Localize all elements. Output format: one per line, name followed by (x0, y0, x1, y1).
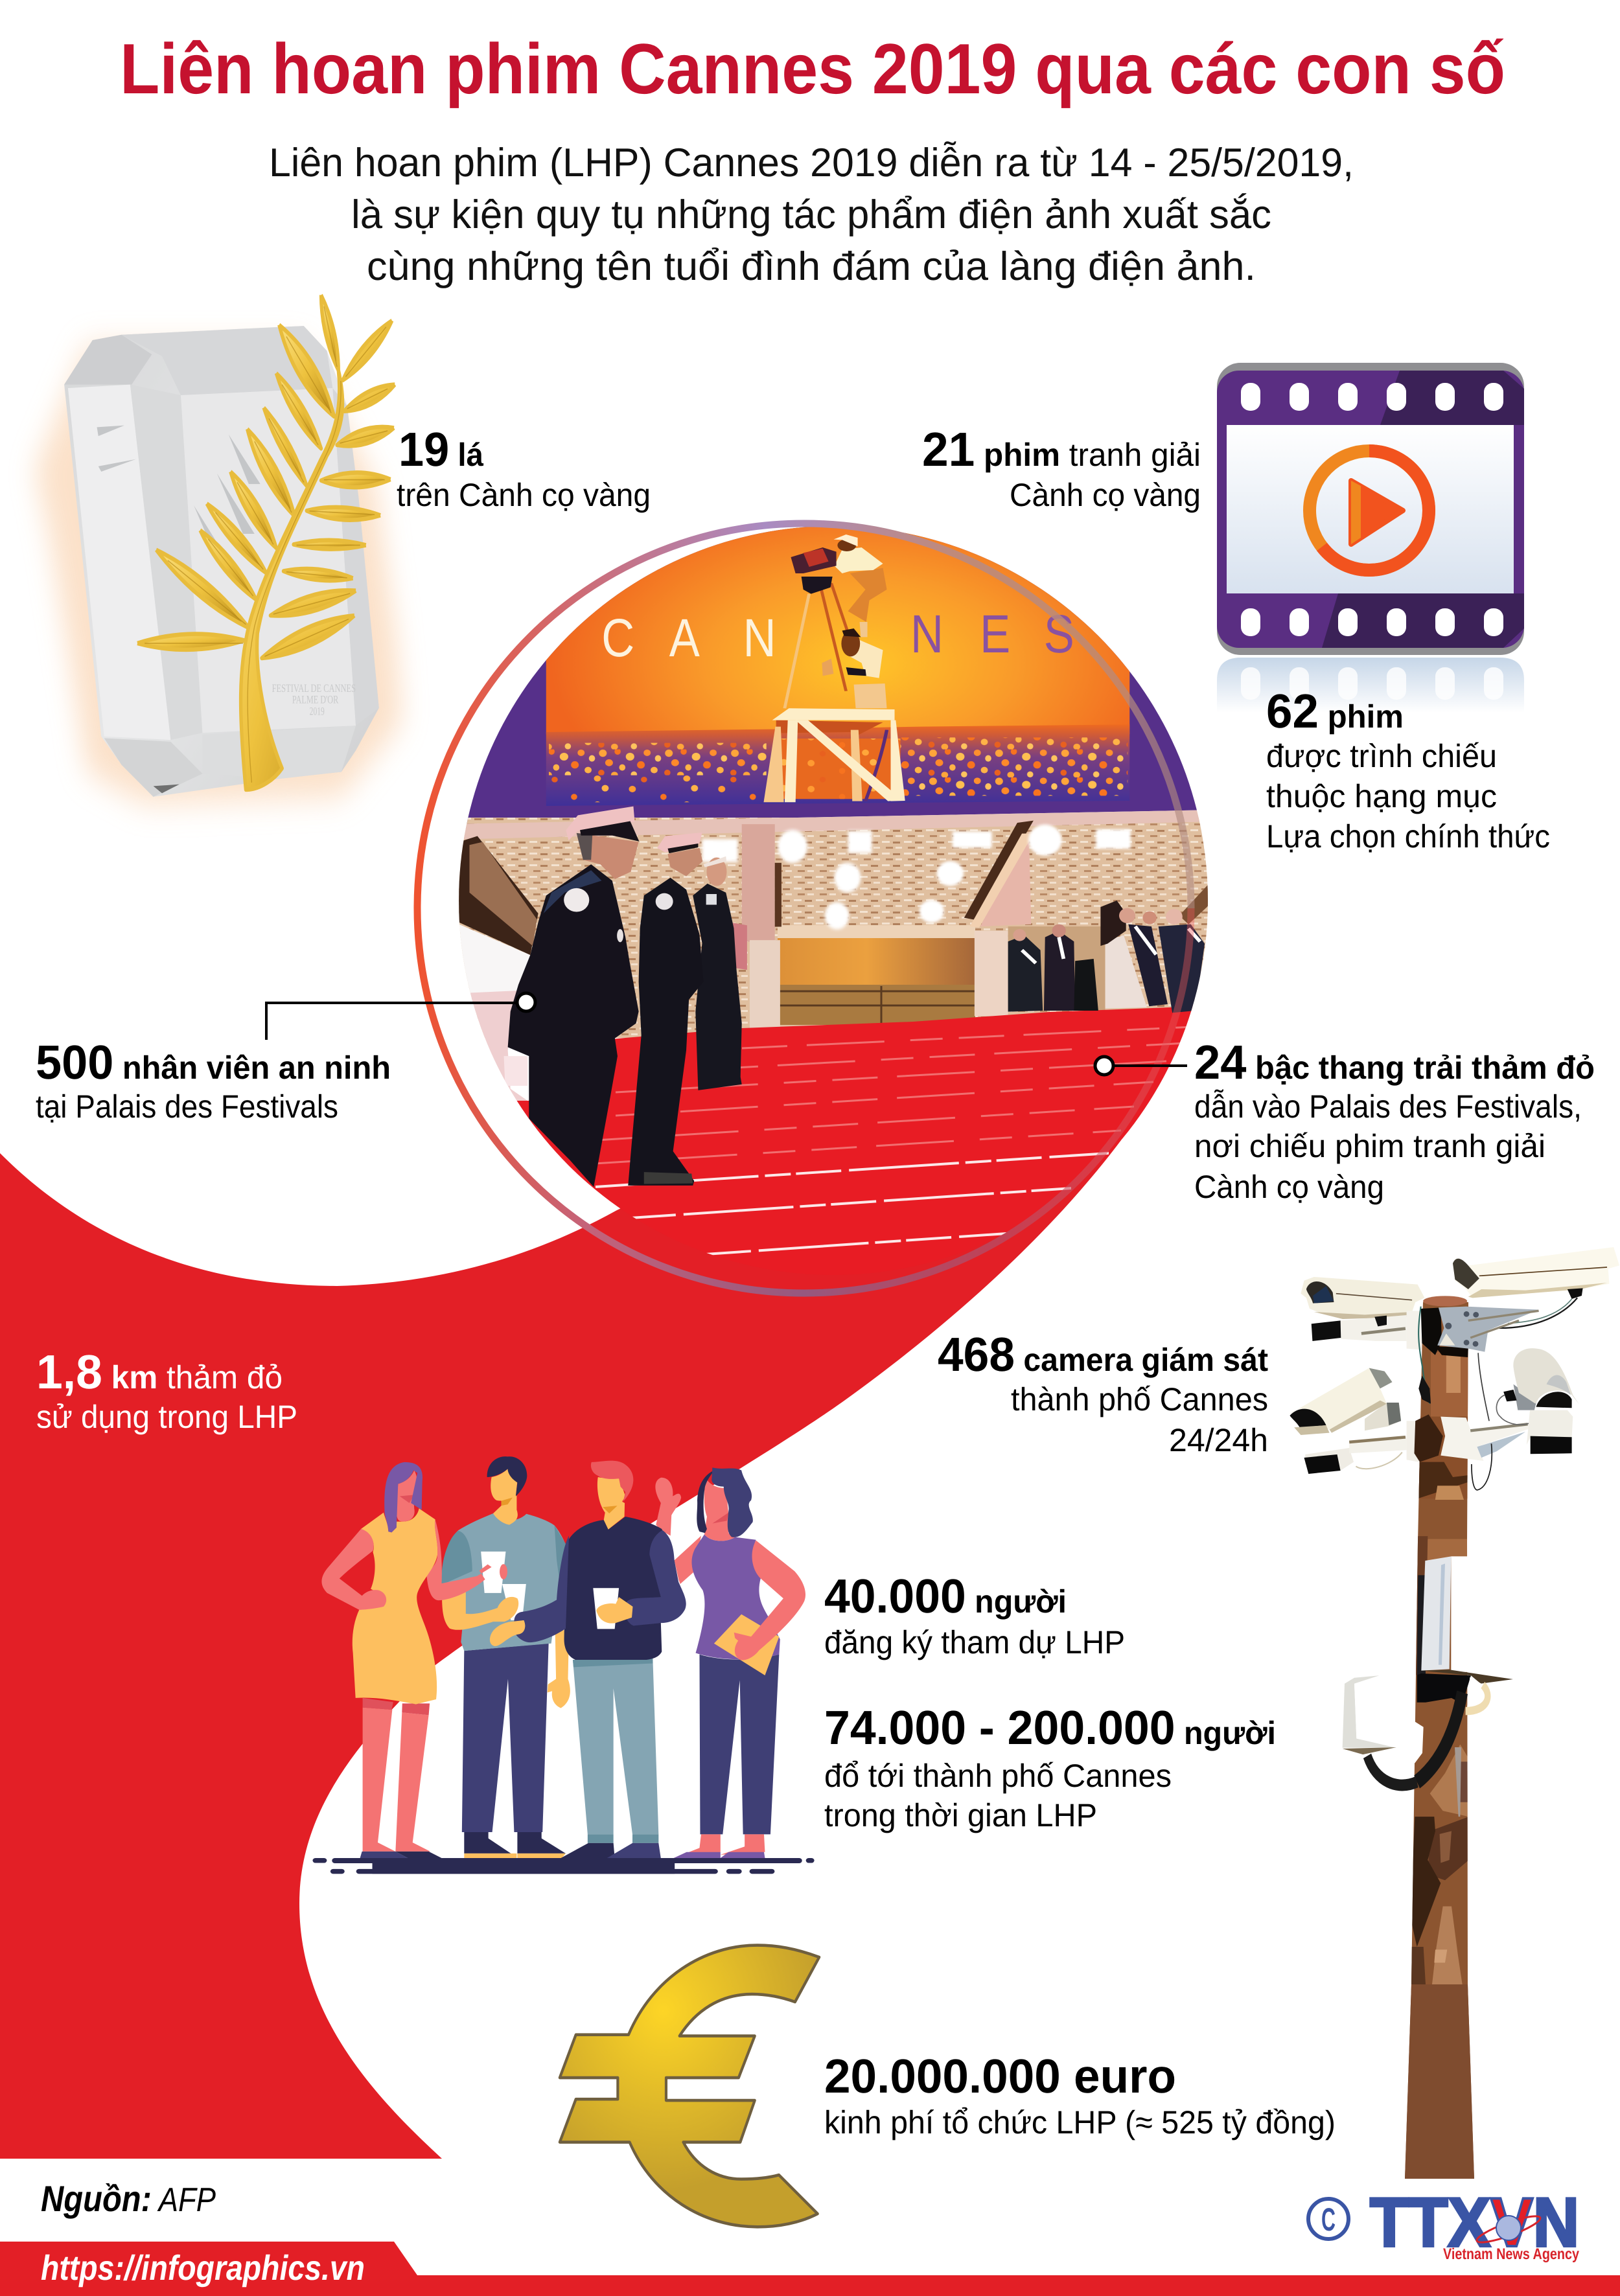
guard 1 (508, 807, 639, 1187)
palm leaves (137, 295, 395, 790)
crystal block (64, 326, 379, 797)
engraved trophy text: PALME D'OR (292, 693, 339, 706)
left drape and flowers (451, 921, 747, 1101)
stat: 21 films in competition: 21 phim tranh giải (922, 422, 1201, 476)
woman in purple top (655, 1467, 805, 1858)
intro text: là sự kiện quy tụ những tác phẩm điện ảnh xuất sắc (351, 192, 1271, 237)
illustration: security camera pole (1289, 1247, 1619, 2179)
stat: 468 cameras: thành phố Cannes (1011, 1381, 1268, 1418)
poster lettering (604, 615, 1072, 657)
stat: 500 security staff: tại Palais des Festivals (36, 1088, 338, 1125)
bright carpet stripes (596, 1153, 1109, 1254)
stat: 21 films in competition: Cành cọ vàng (1010, 477, 1201, 513)
stat: 40,000 attendees: đăng ký tham dự LHP (824, 1624, 1125, 1660)
stat: 62 films (1266, 684, 1550, 855)
poster lettering: CAN (601, 608, 776, 668)
stat: 500 security staff: 500 nhân viên an ninh (36, 1035, 391, 1089)
TTXVN wordmark: TTXVN (1370, 2183, 1579, 2261)
stat: 1.8 km red carpet: sử dụng trong LHP (36, 1399, 297, 1435)
poster sky (546, 520, 1129, 734)
top clamp (1407, 1296, 1539, 1421)
icon: gold euro sign (560, 1946, 819, 2227)
stat: 500 security staff (36, 1035, 391, 1125)
stage beam (447, 810, 1218, 840)
poster scaffold tower (764, 708, 905, 802)
stage ceiling (447, 818, 1218, 1038)
ground line (312, 1858, 815, 1874)
footer bar (0, 2242, 1620, 2296)
play button (1310, 451, 1429, 570)
red swoosh background (0, 1101, 1121, 2159)
security guards (508, 807, 742, 1187)
stat: 21 films in competition (922, 422, 1201, 513)
stat: 74,000 to 200,000 visitors: 74.000 - 200.000 người (824, 1701, 1276, 1754)
stat: 19 leaves: trên Cành cọ vàng (397, 477, 651, 513)
stat: 19 leaves (397, 422, 651, 513)
poster lettering: NES (910, 604, 1074, 664)
carpet stripes (595, 1027, 1192, 1164)
intro text: Liên hoan phim (LHP) Cannes 2019 diễn ra từ 14 - 25/5/2019, (269, 141, 1354, 185)
stat: 1.8 km red carpet: 1,8 km thảm đỏ (36, 1345, 283, 1399)
engraved trophy text (272, 682, 356, 718)
film screen (1227, 425, 1514, 593)
film reflection (1217, 658, 1524, 713)
ring around the photo (417, 523, 1191, 1293)
Cannes 2019 poster (546, 520, 1129, 806)
stat: 24 carpeted steps (1194, 1035, 1595, 1205)
stat: 62 films: 62 phim (1266, 684, 1404, 738)
stat: 24 carpeted steps: Cành cọ vàng (1194, 1169, 1384, 1205)
stat: 40,000 attendees: 40.000 người (824, 1569, 1067, 1623)
callout line: carpet steps (1095, 1057, 1187, 1075)
stat: 24 carpeted steps: dẫn vào Palais des Festivals, (1194, 1088, 1582, 1125)
illustration: group of people (312, 1456, 815, 1874)
stat: 468 cameras: 24/24h (1169, 1422, 1268, 1458)
stat: 40,000 attendees (824, 1569, 1125, 1660)
utility box and cables (1343, 1556, 1513, 1785)
film holes (1241, 383, 1503, 636)
stat: 19 leaves: 19 lá (399, 422, 483, 476)
camera 3 (1289, 1368, 1418, 1474)
icon: film strip with play button (1217, 363, 1524, 713)
callout line: security staff (266, 993, 535, 1040)
engraved trophy text: FESTIVAL DE CANNES (272, 682, 356, 695)
title: Liên hoan phim Cannes 2019 qua các con số (120, 29, 1505, 109)
guard 2 (628, 832, 704, 1186)
man in teal shirt (441, 1456, 570, 1858)
stat: 1.8 km red carpet (36, 1345, 297, 1435)
stat: 62 films: được trình chiếu (1266, 738, 1497, 774)
right-hand group of guards and guests (1008, 901, 1205, 1013)
woman in yellow dress (321, 1462, 507, 1858)
globe emblem (1475, 2212, 1542, 2247)
stat: 468 cameras (938, 1327, 1268, 1458)
intro text (269, 141, 1354, 289)
man in navy sweater (490, 1461, 686, 1858)
stat: 74,000 to 200,000 visitors: trong thời gian LHP (824, 1797, 1097, 1833)
pole trunk (1400, 1302, 1484, 2179)
logo: copyright and TTXVN (1308, 2183, 1580, 2263)
intro text: cùng những tên tuổi đình đám của làng điện ảnh. (367, 244, 1256, 289)
purple backdrop (447, 518, 1218, 824)
red carpet (517, 1005, 1193, 1209)
engraved trophy text: 2019 (310, 705, 325, 718)
copyright mark: C (1321, 2201, 1336, 2238)
footer website link: https://infographics.vn (41, 2249, 365, 2288)
stage right: pillar and lights (920, 821, 1209, 1016)
stage left: pillar and lights (459, 824, 872, 1029)
poster camera operators (785, 534, 887, 708)
photo circle: Cannes poster and red carpet (459, 527, 1208, 1256)
copyright mark (1308, 2199, 1348, 2239)
stat: 20,000,000 euro budget (824, 2049, 1336, 2141)
stat: 20,000,000 euro budget: kinh phí tổ chức LHP (≈ 525 tỷ đồng) (824, 2104, 1336, 2141)
lower clamp (1414, 1414, 1530, 1490)
guard 3 (693, 856, 742, 1090)
footer source: Nguồn: AFP (41, 2178, 216, 2219)
stat: 468 cameras: 468 camera giám sát (938, 1327, 1268, 1381)
agency name: Vietnam News Agency (1443, 2245, 1580, 2263)
stat: 74,000 to 200,000 visitors (824, 1701, 1276, 1833)
peach glow behind trophy (35, 345, 402, 804)
stat: 74,000 to 200,000 visitors: đổ tới thành phố Cannes (824, 1758, 1172, 1794)
stat: 24 carpeted steps: 24 bậc thang trải thảm đỏ (1194, 1035, 1595, 1089)
stat: 62 films: Lựa chọn chính thức (1266, 818, 1550, 855)
camera 1 (1301, 1277, 1424, 1341)
camera 2 (1453, 1247, 1619, 1328)
stage hall: shelf, golden wall and benches (778, 925, 975, 1025)
illustration: crystal trophy with golden palm (35, 295, 402, 804)
stat: 20,000,000 euro budget: 20.000.000 euro (824, 2049, 1176, 2103)
stat: 62 films: thuộc hạng mục (1266, 778, 1497, 814)
camera 4 (1496, 1348, 1580, 1454)
stat: 24 carpeted steps: nơi chiếu phim tranh giải (1194, 1128, 1545, 1164)
poster sea of lights (546, 724, 1129, 806)
palm stem and leaf highlights (145, 306, 388, 783)
